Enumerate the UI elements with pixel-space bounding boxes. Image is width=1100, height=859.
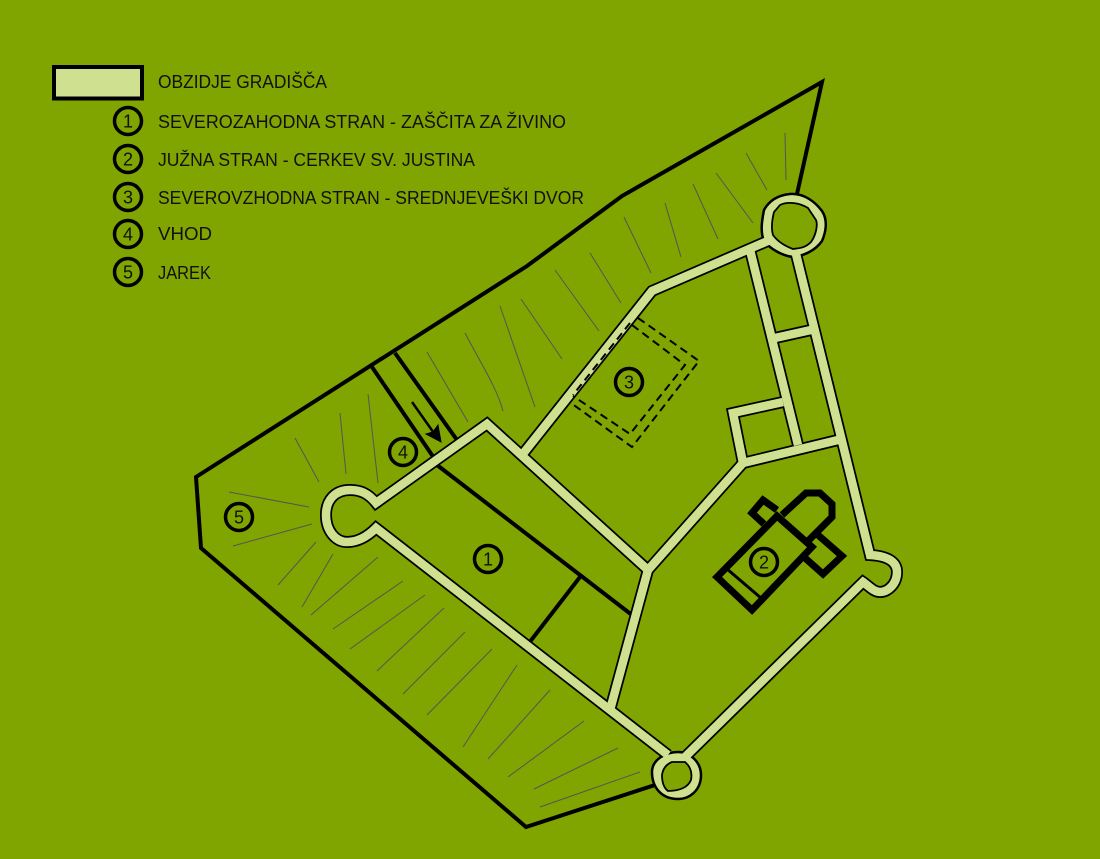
northeast tower: [772, 203, 817, 249]
church south chapel: [805, 535, 842, 574]
entrance passage lines: [372, 353, 457, 458]
marker 5: 5: [234, 508, 244, 528]
castle walls: [326, 194, 897, 799]
legend item 3: [114, 184, 584, 210]
legend item 2: [114, 146, 475, 172]
church narthex line: [727, 569, 761, 598]
legend swatch: castle wall: [54, 67, 142, 98]
legend item 5: 5: [123, 262, 133, 282]
marker 5: [226, 504, 252, 530]
entrance arrow: [412, 402, 441, 442]
moat hatching: [229, 133, 786, 807]
legend item 1: SEVEROZAHODNA STRAN - ZAŠČITA ZA ŽIVINO: [158, 111, 566, 132]
tower outlines: [652, 194, 826, 799]
inner division lines: [437, 465, 632, 643]
marker 1: [474, 546, 502, 572]
legend item 4: 4: [123, 224, 133, 244]
church north chapel: [752, 500, 777, 524]
legend item 1: 1: [123, 112, 133, 132]
legend item 3: SEVEROVZHODNA STRAN - SREDNJEVEŠKI DVOR: [158, 187, 584, 208]
legend item 1: [114, 108, 566, 134]
legend item 2: 2: [123, 150, 133, 170]
church of St Justin: [717, 493, 842, 610]
legend: [54, 67, 584, 286]
outer moat line: [196, 82, 822, 827]
marker 2: [750, 548, 778, 576]
south tower: [662, 762, 691, 791]
legend item 5: [114, 258, 211, 286]
wall fill: [326, 240, 897, 757]
legend item 2: JUŽNA STRAN - CERKEV SV. JUSTINA: [158, 150, 475, 170]
legend item 5: JAREK: [158, 263, 211, 283]
marker 4: 4: [398, 442, 408, 462]
church apse: [782, 493, 832, 541]
marker 1: 1: [483, 550, 493, 570]
marker 3: 3: [624, 372, 634, 392]
church nave: [717, 516, 812, 610]
marker 3: [616, 368, 642, 396]
wall outlines: [326, 240, 897, 757]
legend item 4: [114, 220, 212, 248]
marker 2: 2: [759, 552, 769, 572]
marker 4: [390, 438, 416, 466]
legend item 3: 3: [123, 188, 133, 208]
legend label: wall: OBZIDJE GRADIŠČA: [158, 71, 327, 92]
legend item 4: VHOD: [158, 224, 212, 244]
medieval manor: dashed outline: [571, 318, 699, 447]
